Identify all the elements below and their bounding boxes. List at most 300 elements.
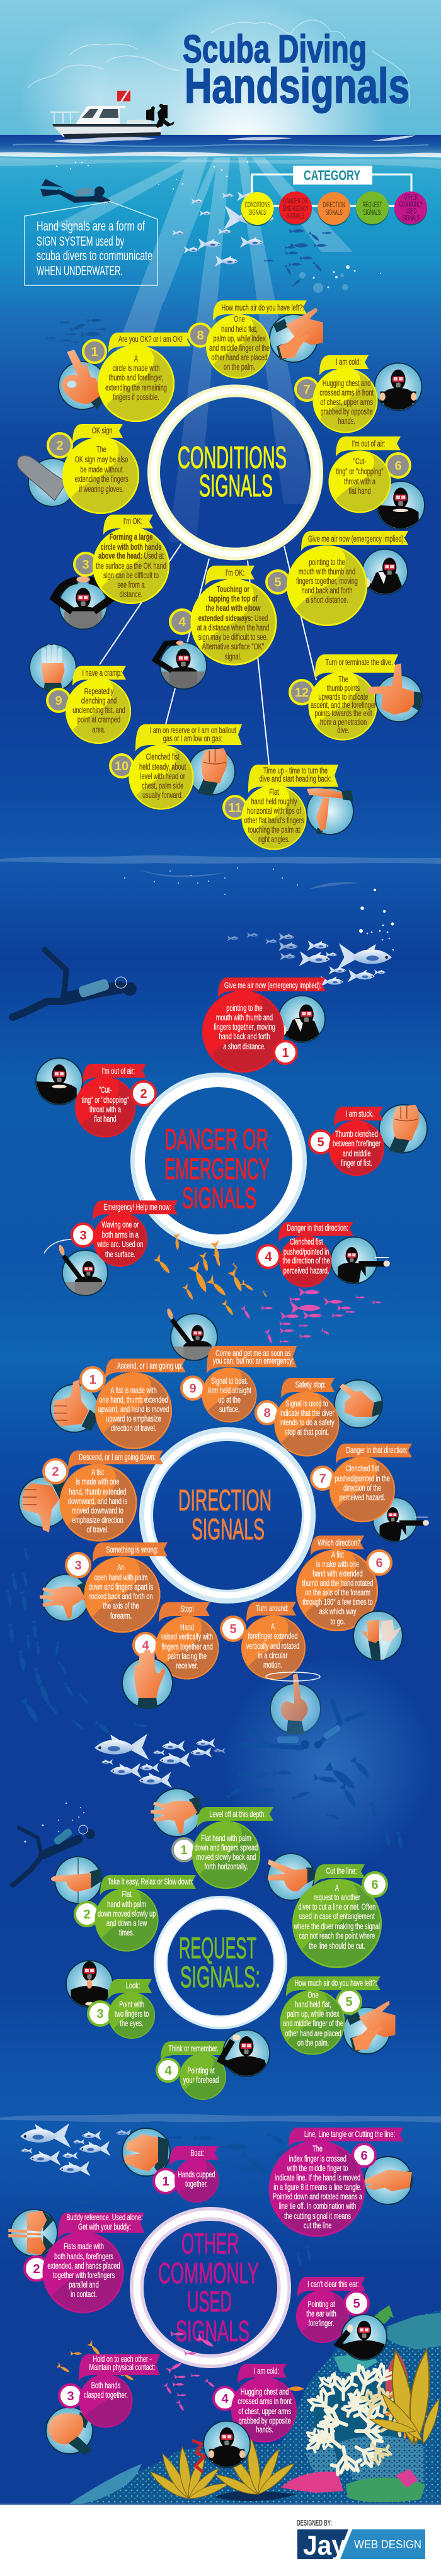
ribbon: help bbox=[93, 1200, 178, 1221]
bubble text bbox=[180, 2053, 226, 2100]
category: request bbox=[356, 191, 389, 225]
bubble text: dive. bbox=[337, 725, 350, 736]
ribbon: wrong: Something is wrong: bbox=[106, 1544, 159, 1555]
badge 7: 7 bbox=[303, 383, 311, 397]
bubble text: other hand are placed bbox=[211, 352, 268, 363]
category: other: USED bbox=[405, 207, 416, 216]
badge 8: 8 bbox=[263, 1406, 271, 1420]
category: conditions: SIGNALS bbox=[249, 208, 266, 217]
bubble text: direction of travel. bbox=[111, 1423, 156, 1433]
bubble text: mouth with thumb and bbox=[299, 566, 355, 577]
ribbon: cramp bbox=[72, 666, 126, 686]
bubble text: together. bbox=[185, 2179, 208, 2189]
heading: other: USED bbox=[187, 2285, 232, 2318]
card: can't clear ear bbox=[296, 2277, 387, 2360]
bubble text bbox=[175, 2158, 219, 2203]
bubble text: intends to do a safety bbox=[279, 1417, 335, 1428]
bubble text: unclenching fist, and bbox=[72, 705, 125, 715]
icon: diver pointing bbox=[331, 1237, 390, 1285]
intro text box: SIGN SYSTEM used by bbox=[37, 234, 124, 249]
bubble text bbox=[296, 1549, 378, 1631]
bubble text bbox=[268, 2140, 365, 2237]
bubble text bbox=[329, 1457, 395, 1522]
icon: diver hugging bbox=[374, 363, 422, 411]
bubble text: sign can be difficult to bbox=[103, 570, 159, 581]
bubble text: above the head: Used at bbox=[98, 550, 164, 561]
badge 8 bbox=[189, 324, 212, 346]
coral branches bbox=[306, 2362, 399, 2475]
bubble text bbox=[190, 579, 277, 665]
bubble text: other hand are placed bbox=[285, 2028, 341, 2039]
bubble text: grabbed by opposite bbox=[239, 2415, 291, 2426]
bubble text: stop at that point. bbox=[285, 1427, 329, 1437]
badge 2 bbox=[43, 1459, 67, 1483]
badge 2 bbox=[132, 1081, 156, 1105]
pink fish school bbox=[240, 1287, 382, 1344]
badge 1: 1 bbox=[282, 1046, 289, 1060]
card: turn around bbox=[221, 1602, 321, 1734]
badge 4 bbox=[257, 1245, 280, 1268]
bubble text: hands. bbox=[256, 2424, 273, 2435]
silver fish school lower bbox=[20, 2123, 132, 2176]
bubble text: A fist is made with bbox=[110, 1385, 157, 1396]
bubble text: line tie off. In combination with bbox=[279, 2201, 356, 2211]
bubble text: distance. bbox=[120, 589, 142, 600]
bubble text: "Cut- bbox=[353, 456, 366, 467]
bubble text: parallel and bbox=[69, 2279, 99, 2290]
lower wave band bbox=[0, 2114, 441, 2123]
badge 6 bbox=[353, 2144, 375, 2167]
badge 12 bbox=[290, 680, 314, 704]
bubble text: surface. bbox=[219, 1404, 239, 1415]
ribbon: OK sign: OK sign bbox=[92, 425, 112, 436]
ribbon: come and get me: Come and get me as soon as bbox=[215, 1348, 291, 1359]
category: request: SIGNALS: bbox=[363, 208, 382, 217]
ribbon: air left bbox=[286, 1976, 381, 1997]
ribbon: out of air: I'm out of air: bbox=[352, 438, 385, 449]
bubble text: fingers together, moving bbox=[296, 576, 358, 586]
icon: stop hand bbox=[122, 1650, 173, 1708]
bubble text: raised vertically with bbox=[161, 1631, 213, 1642]
bubble text: forearm. bbox=[110, 1610, 132, 1621]
ribbon: stuck: I am stuck. bbox=[346, 1108, 374, 1119]
card: danger out of air bbox=[36, 1058, 156, 1137]
card: boat bbox=[122, 2128, 219, 2203]
bubble text: the surface as the OK hand bbox=[96, 561, 166, 571]
bubble text: Clenched fist bbox=[290, 1236, 323, 1247]
water surface waves and foam bbox=[0, 135, 441, 169]
badge 8 bbox=[256, 1401, 278, 1424]
card: look bbox=[66, 1961, 155, 2039]
bubble text: crossed arms in front bbox=[238, 2396, 292, 2407]
mid wave band bbox=[0, 855, 441, 889]
bubble text: and middle bbox=[343, 1148, 371, 1159]
category: other: SIGNALS bbox=[402, 214, 420, 223]
bubble text: a short distance. bbox=[223, 1041, 266, 1052]
badge 9: 9 bbox=[55, 694, 62, 708]
ribbon: level off: Level off at this depth: bbox=[209, 1809, 266, 1820]
bubble text: flat hand bbox=[348, 486, 371, 496]
bubble text: where the diver making the signal bbox=[294, 1921, 380, 1932]
bubble text bbox=[93, 1212, 147, 1267]
category: other: OTHER bbox=[404, 193, 418, 202]
bubble text bbox=[192, 1821, 260, 1889]
bubble text: Clenched fist bbox=[346, 1463, 379, 1474]
badge 11 bbox=[224, 796, 246, 819]
bubble text bbox=[79, 2374, 132, 2427]
bubble text: through 180° a few times to bbox=[302, 1597, 373, 1607]
bubble text: A bbox=[134, 353, 138, 364]
ribbon: time up: Time up - time to turn the bbox=[263, 765, 328, 776]
ribbon: reserve bbox=[135, 724, 242, 751]
bubble text: A bbox=[335, 1883, 339, 1893]
bubble text: clasped together. bbox=[84, 2390, 128, 2400]
bubble text: both arms in a bbox=[102, 1229, 139, 1240]
ring: direction signals bbox=[146, 1434, 309, 1597]
badge 9 bbox=[47, 689, 70, 712]
card: ascend bbox=[50, 1359, 186, 1449]
ribbon: cold: I am cold: bbox=[336, 356, 361, 367]
category: other bbox=[394, 191, 427, 225]
bubble text bbox=[59, 1464, 137, 1542]
bubble text: together with forefingers bbox=[53, 2270, 115, 2281]
badge 11: 11 bbox=[228, 801, 242, 815]
heading: conditions signals bbox=[178, 441, 287, 503]
bubble text: times. bbox=[119, 1927, 134, 1938]
badge 4 bbox=[157, 2059, 180, 2082]
card: direction danger bbox=[311, 1444, 429, 1543]
bubble text: the direction of the bbox=[282, 1255, 330, 1266]
ribbon: hold on: Hold on to each other - bbox=[93, 2354, 152, 2364]
bubble text: a short distance. bbox=[306, 595, 348, 605]
ribbon: think: Think or remember. bbox=[168, 2043, 219, 2054]
ribbon: take it easy: Take it easy, Relax or Slow down: bbox=[108, 1876, 193, 1887]
ribbon: are you OK: Are you OK? or I am OK! bbox=[118, 334, 183, 345]
icon: diver waving bbox=[44, 1240, 108, 1298]
bubble text bbox=[43, 2232, 123, 2313]
bubble text: One bbox=[307, 1990, 319, 2000]
icon: T hands bbox=[307, 788, 353, 835]
bubble text: on the palm. bbox=[297, 2037, 329, 2048]
card: time up bbox=[224, 765, 353, 850]
bubble text: extended sideways: Used bbox=[198, 613, 268, 624]
bubble text: motion. bbox=[263, 1660, 282, 1670]
bubble text: crossed arms in front bbox=[319, 387, 374, 398]
card: on reserve bbox=[110, 724, 242, 810]
bubble text: Clenched fist bbox=[146, 751, 180, 762]
bubble text: signal. bbox=[225, 651, 241, 662]
ribbon: buddy reference: Get with your buddy: bbox=[78, 2221, 131, 2232]
badge 10: 10 bbox=[115, 760, 129, 773]
title: Scuba Diving bbox=[183, 28, 367, 71]
clouds bbox=[28, 20, 410, 107]
bubble text: horizontal with tips of bbox=[247, 806, 301, 816]
ribbon: how much air: How much air do you have left?: bbox=[222, 302, 304, 313]
bubble text: in a circular bbox=[258, 1650, 287, 1661]
bubble text: hand with palm bbox=[107, 1899, 146, 1910]
card: I am stuck bbox=[309, 1105, 427, 1176]
badge 1 bbox=[81, 1367, 105, 1391]
badge 3: 3 bbox=[79, 1229, 87, 1243]
icon: fist bbox=[188, 748, 235, 796]
title bbox=[183, 28, 410, 113]
dive boat with flag and divers bbox=[50, 91, 175, 139]
category: danger: EMERGENCY bbox=[283, 205, 309, 214]
bubble text bbox=[329, 1120, 384, 1176]
bubble text: ask which way bbox=[319, 1606, 357, 1617]
bubble text: A fist bbox=[331, 1549, 344, 1560]
dark fish school right bbox=[226, 1756, 404, 1850]
ribbon: I'm OK: I'm OK: bbox=[123, 516, 142, 527]
ghost divers and glow bbox=[220, 1656, 435, 1871]
bubble text: palm up, while index bbox=[214, 333, 266, 344]
bubble text: diver to cut a line or net. Often bbox=[298, 1901, 375, 1912]
ribbon: air left: How much air do you have left?: bbox=[295, 1978, 377, 1988]
card: line tangle bbox=[268, 2128, 412, 2237]
icon: rotating fists bbox=[353, 1611, 403, 1660]
badge 6: 6 bbox=[375, 1556, 383, 1570]
bubble text: forth horizontally. bbox=[204, 1861, 248, 1872]
category: other: COMMONLY bbox=[399, 200, 423, 209]
ribbon: which direction: Which direction? bbox=[318, 1537, 360, 1548]
bubble text bbox=[206, 314, 270, 379]
bubble text: pushed/pointed in the bbox=[335, 1473, 390, 1484]
bubble text: hand back and forth bbox=[301, 585, 353, 596]
bubble text bbox=[94, 1888, 159, 1951]
bubble text: Pointing at bbox=[187, 2065, 215, 2076]
bubble text: usually forward. bbox=[142, 790, 183, 801]
bubble text: in contact. bbox=[71, 2289, 97, 2300]
bubble text: perceived hazard. bbox=[284, 1265, 329, 1276]
badge 3: 3 bbox=[67, 2390, 74, 2403]
card: safety stop bbox=[256, 1378, 382, 1456]
ribbon: ascend: Ascend, or I am going up: bbox=[117, 1360, 183, 1371]
bubble text: right angles. bbox=[258, 834, 290, 845]
bubble text: from a penetration bbox=[320, 717, 367, 727]
badge 3 bbox=[72, 1224, 94, 1246]
bubble text: on the palm. bbox=[224, 362, 255, 372]
heading: conditions signals: CONDITIONS bbox=[178, 441, 287, 475]
ribbon: look bbox=[108, 1979, 152, 1999]
ribbon: boat: Boat: bbox=[190, 2148, 204, 2158]
heading: other: COMMONLY bbox=[158, 2257, 259, 2289]
ribbon: buddy reference: Buddy reference. Used alone: bbox=[66, 2212, 143, 2223]
intro text box: WHEN UNDERWATER. bbox=[37, 264, 123, 278]
bubble text: down and fingers spread bbox=[195, 1842, 258, 1853]
heading: request bbox=[179, 1931, 260, 1993]
bubble text: mouth with thumb and bbox=[216, 1012, 273, 1023]
bubble text: the axis of the bbox=[103, 1600, 139, 1611]
bubble text: Touching or bbox=[217, 584, 249, 595]
bubble text: both hands, forefingers bbox=[54, 2251, 113, 2262]
ribbon: cut the line: Cut the line: bbox=[326, 1866, 357, 1876]
bubble text: extended, and hands placed bbox=[47, 2260, 120, 2271]
heading: direction: DIRECTION bbox=[178, 1483, 272, 1517]
ribbon: give me air: Give me air now (emergency implied): bbox=[308, 533, 405, 544]
ribbon: descend: Descend, or I am going down: bbox=[79, 1452, 156, 1462]
ring: danger or emergency signals bbox=[137, 1080, 300, 1242]
badge 2: 2 bbox=[56, 439, 64, 453]
small red fish near reef bbox=[192, 2441, 205, 2472]
pink and orange small fish bbox=[55, 2331, 216, 2412]
badge 1: 1 bbox=[180, 1844, 188, 1857]
icon: diver arm up bbox=[166, 1308, 217, 1363]
ribbon: I'm OK bbox=[103, 515, 153, 535]
card: hold on bbox=[46, 2354, 160, 2455]
bubble text: pointing to the bbox=[226, 1003, 263, 1013]
ribbon: hold on: Maintain physical contact: bbox=[89, 2362, 155, 2373]
ribbon: danger direction bbox=[336, 1444, 412, 1464]
card: out of air bbox=[329, 436, 425, 529]
bubble text: chest, palm side bbox=[142, 780, 184, 791]
category: danger bbox=[279, 191, 312, 225]
bubble text: down moved slowly up bbox=[98, 1908, 156, 1919]
bubble text: extending the fingers bbox=[74, 474, 129, 484]
bubble text: Waving one or bbox=[101, 1219, 139, 1230]
badge 4: 4 bbox=[142, 1639, 149, 1653]
bubble text: Point with bbox=[119, 1999, 144, 2010]
bubble text: fingers together, moving bbox=[214, 1022, 275, 1032]
card: I'm OK large circle bbox=[54, 515, 169, 629]
bubble text: hand held roughly bbox=[251, 796, 297, 807]
icon: thumb and forefinger bbox=[368, 664, 422, 722]
bubble text: level with head or bbox=[140, 771, 185, 782]
icon: cramp hand bbox=[30, 644, 76, 691]
bubble text: receiver. bbox=[176, 1660, 198, 1671]
badge 5: 5 bbox=[345, 1995, 353, 2009]
bubble text: indicate that the diver bbox=[279, 1408, 335, 1418]
bubble text: fingers if possible. bbox=[113, 392, 159, 402]
bubble text: circle with both hands bbox=[101, 542, 162, 552]
bubble text bbox=[93, 527, 169, 604]
icon: clasped hands bbox=[46, 2407, 93, 2455]
card: danger give me air bbox=[202, 977, 326, 1073]
bubble text: downward, and hand is bbox=[68, 1496, 127, 1507]
ribbon: buddy reference bbox=[58, 2212, 144, 2239]
ribbon: help: Emergency! Help me now: bbox=[103, 1202, 171, 1212]
card: other I am cold bbox=[203, 2364, 297, 2468]
badge 9: 9 bbox=[189, 1382, 197, 1396]
badge 5: 5 bbox=[229, 1622, 237, 1636]
ring: request signals bbox=[161, 1903, 280, 2022]
bubble text: of chest, upper arms bbox=[320, 397, 373, 407]
bubble text: the cutting signal it means bbox=[284, 2211, 351, 2221]
ribbon: out of air: I'm out of air: bbox=[102, 1066, 135, 1076]
bubble text: area. bbox=[93, 724, 105, 735]
intro text box bbox=[25, 202, 158, 285]
bubble text: two fingers to bbox=[115, 2009, 149, 2019]
logo: Jay Web Design: WEB DESIGN bbox=[354, 2538, 421, 2551]
bubble text: held steady, about bbox=[139, 761, 186, 772]
bubble text: grabbed by opposite bbox=[321, 406, 373, 417]
ribbon: ear bbox=[297, 2277, 365, 2297]
icon: crossed fingers bbox=[363, 2157, 412, 2204]
ribbon: ear: I can't clear this ear: bbox=[307, 2279, 359, 2289]
silver fish school direction section bbox=[94, 1734, 226, 1788]
bubble text: up at the bbox=[218, 1394, 241, 1405]
badge 1 bbox=[173, 1838, 195, 1861]
ribbon: turn around bbox=[246, 1602, 296, 1622]
dark fish school lower bbox=[73, 2131, 312, 2267]
category: direction: DIRECTION bbox=[323, 201, 345, 210]
bubble text: Hugging chest and bbox=[323, 378, 370, 389]
logo: Jay Web Design bbox=[297, 2529, 425, 2561]
category: danger: DANGER OR bbox=[284, 197, 307, 206]
coral reef scenery bbox=[0, 2305, 441, 2505]
ribbon: give me air: Give me air now (emergency implied): bbox=[224, 980, 321, 991]
bubble text: sign may be difficult to see. bbox=[198, 632, 268, 642]
bubble text: down and fingers apart is bbox=[89, 1582, 153, 1592]
bubble text bbox=[296, 2290, 349, 2343]
badge 5 bbox=[221, 1617, 245, 1641]
bubble text: finger of fist. bbox=[341, 1158, 372, 1168]
ribbon: come and get me: you can, but not an emergency: bbox=[213, 1355, 294, 1366]
bubble text bbox=[280, 1990, 345, 2055]
bubble text: and down a few bbox=[106, 1918, 147, 1929]
bubble text: cut the line bbox=[304, 2220, 332, 2231]
badge 9 bbox=[181, 1377, 204, 1399]
icon: diver ear bbox=[338, 2315, 387, 2360]
ribbon: cramp: I have a cramp: bbox=[82, 668, 122, 678]
card: are you OK bbox=[59, 333, 191, 422]
icon: glove bbox=[18, 455, 76, 506]
badge 2 bbox=[48, 433, 72, 457]
icon: diver forehead bbox=[220, 2030, 270, 2077]
category: conditions: CONDITIONS bbox=[245, 201, 270, 210]
badge 1 bbox=[274, 1041, 297, 1064]
bubble text: request to another bbox=[314, 1892, 360, 1903]
bubble text bbox=[202, 991, 284, 1073]
icon: diver look bbox=[66, 1961, 113, 2007]
bubble text bbox=[242, 785, 306, 850]
bubble text: "Cut- bbox=[99, 1085, 112, 1095]
badge 2: 2 bbox=[52, 1465, 59, 1479]
bubble text: ascent, and the forefinger bbox=[311, 700, 376, 710]
logo: Jay Web Design: Jay bbox=[303, 2530, 346, 2561]
bubble text: hand, thumb extended bbox=[69, 1486, 127, 1497]
badge 1 bbox=[154, 2169, 178, 2193]
bubble text: touching the palm at bbox=[248, 824, 301, 835]
badge 5: 5 bbox=[274, 576, 282, 590]
bubble text bbox=[155, 1616, 219, 1679]
heading: direction: SIGNALS bbox=[192, 1512, 265, 1546]
ribbon: time up: dive and start heading back: bbox=[260, 773, 331, 784]
bubble text bbox=[129, 744, 194, 810]
bubble text bbox=[98, 345, 175, 422]
bubble text: The bbox=[338, 674, 348, 685]
light rays bbox=[50, 157, 353, 542]
orange fish school bbox=[152, 1233, 268, 1317]
bubble text: pointing to the bbox=[309, 557, 345, 567]
bubble text: perceived hazard. bbox=[340, 1492, 386, 1503]
badge 4 bbox=[214, 2387, 236, 2410]
card: danger direction bbox=[257, 1222, 390, 1287]
card: emergency help bbox=[44, 1200, 178, 1298]
bubble text: One bbox=[234, 314, 245, 324]
icon: index finger circling bbox=[266, 1672, 321, 1734]
bubble text: the surface. bbox=[105, 1249, 135, 1260]
intro text box: Hand signals are a form of bbox=[37, 219, 145, 234]
bubble text: Arm held straight bbox=[208, 1385, 251, 1396]
ribbon: come and get me bbox=[207, 1346, 297, 1374]
bubble text: OK sign may be also bbox=[75, 454, 129, 465]
silver and dark fish upper school bbox=[47, 191, 331, 345]
badge 6 bbox=[363, 1872, 387, 1896]
bubble text bbox=[292, 1879, 382, 1968]
bubble text: throat with a bbox=[89, 1104, 121, 1115]
ribbon: line tangle: Line, Line tangle or Cutting the line: bbox=[304, 2129, 395, 2140]
bubble text: upward to emphasize bbox=[106, 1413, 161, 1424]
